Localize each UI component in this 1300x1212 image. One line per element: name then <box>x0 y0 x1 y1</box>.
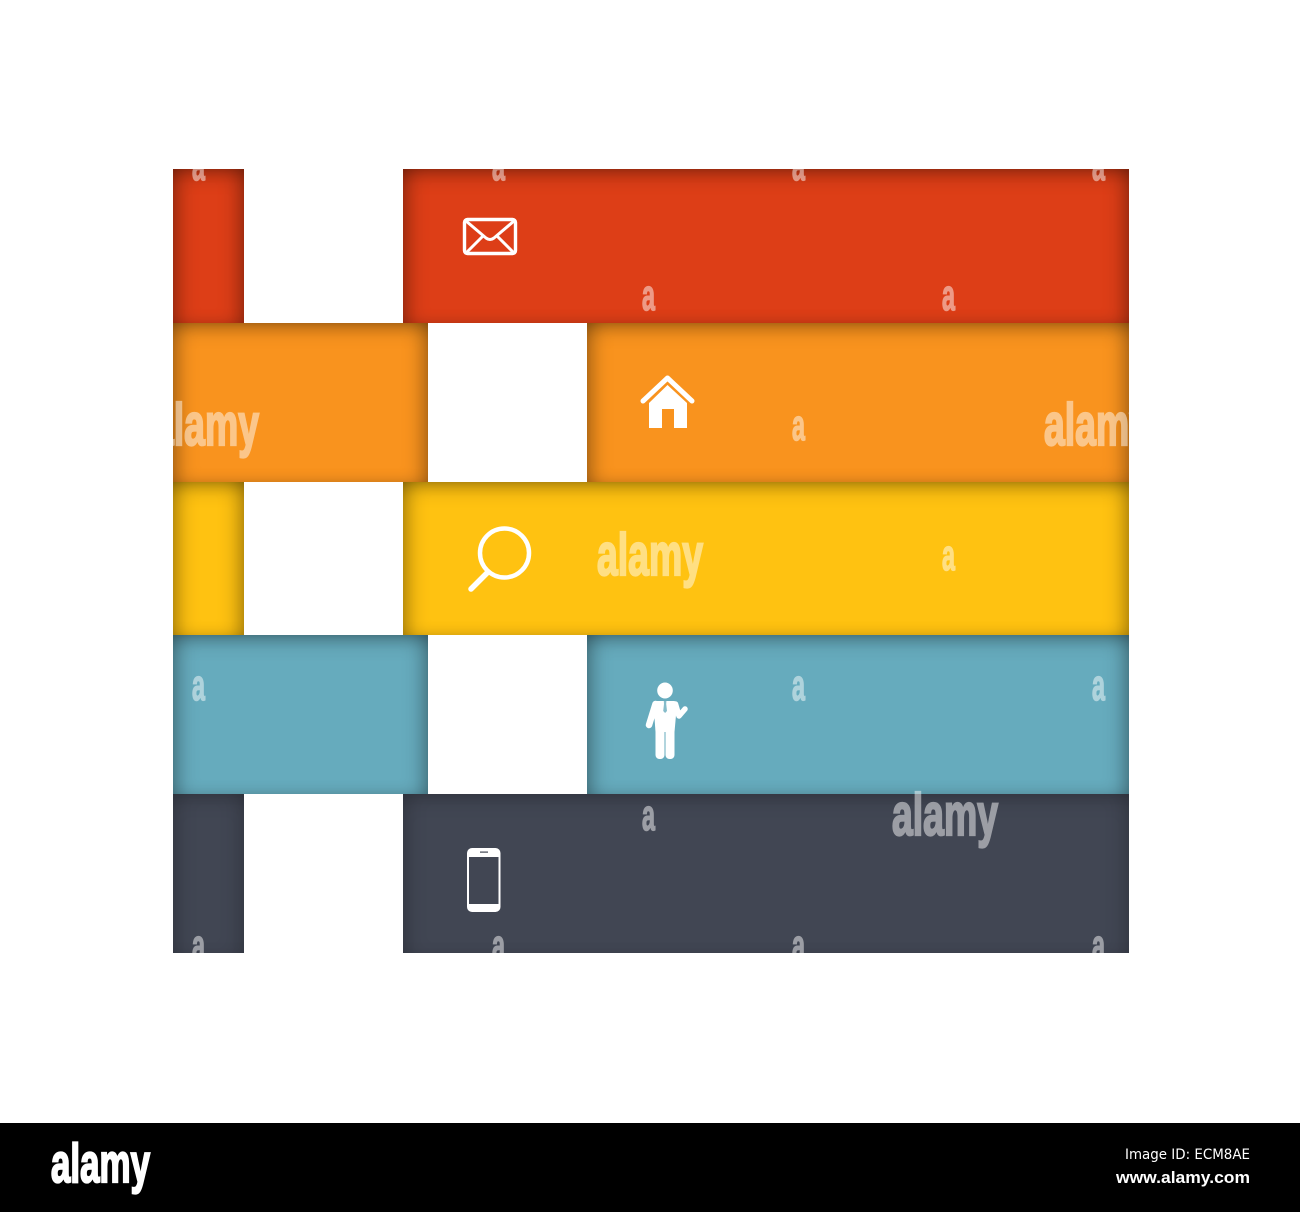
overlay: watermarks and icons <box>173 169 1129 953</box>
teal left segment <box>173 635 428 794</box>
yellow left segment <box>173 482 244 635</box>
panel: navy band <box>173 794 1129 953</box>
icon: smartphone <box>467 848 500 912</box>
watermarks: a <box>792 401 805 450</box>
watermarks: a <box>1092 141 1105 190</box>
watermarks: a <box>642 271 655 320</box>
watermarks: a <box>792 661 805 710</box>
footer text: alamy <box>51 1132 150 1194</box>
watermarks: a <box>1092 921 1105 970</box>
footer text: www.alamy.com <box>1115 1168 1250 1187</box>
icon: businessman <box>649 682 685 759</box>
watermarks: alamy <box>892 782 998 848</box>
watermarks <box>153 141 1150 970</box>
watermarks: alamy <box>153 392 259 458</box>
navy left segment <box>173 794 244 953</box>
watermarks: a <box>942 271 955 320</box>
watermarks: alamy <box>597 522 703 588</box>
footer bar <box>0 1123 1300 1212</box>
watermarks: a <box>492 141 505 190</box>
watermarks: a <box>492 921 505 970</box>
teal right segment <box>587 635 1129 794</box>
icon: magnifying glass <box>471 528 529 589</box>
icon: envelope <box>464 220 516 254</box>
red left segment <box>173 169 244 323</box>
red right segment <box>403 169 1129 323</box>
orange left segment <box>173 323 428 482</box>
watermarks: a <box>192 921 205 970</box>
watermarks: a <box>642 791 655 840</box>
panel: orange band <box>173 323 1129 482</box>
watermarks: alamy <box>1044 392 1150 458</box>
orange right segment <box>587 323 1129 482</box>
watermarks: a <box>1092 661 1105 710</box>
watermarks: a <box>792 921 805 970</box>
panel: red band <box>173 169 1129 323</box>
watermarks: a <box>942 531 955 580</box>
footer text: Image ID: ECM8AE <box>1125 1147 1250 1163</box>
panel: yellow band <box>173 482 1129 635</box>
watermarks: a <box>192 141 205 190</box>
icon: house <box>643 378 692 428</box>
footer text <box>51 1132 1250 1195</box>
watermarks: a <box>792 141 805 190</box>
panel: teal band <box>173 635 1129 794</box>
yellow right segment <box>403 482 1129 635</box>
watermarks: a <box>192 661 205 710</box>
navy right segment <box>403 794 1129 953</box>
